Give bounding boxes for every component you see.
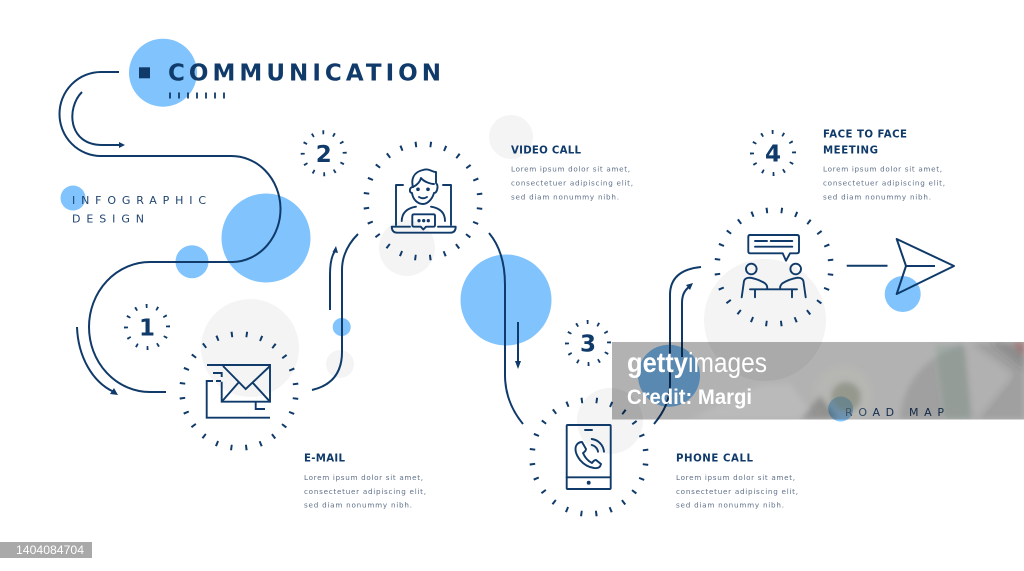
text: e-mail [304, 454, 426, 510]
watermark band: images [688, 347, 767, 378]
road map label: ROAD MAP [845, 406, 944, 419]
image id tag [0, 542, 92, 558]
arrow: left curved [77, 327, 118, 395]
text: video call: Lorem ipsum dolor sit amet, [511, 165, 630, 174]
text: e-mail: Lorem ipsum dolor sit amet, [304, 473, 423, 482]
text: video call: sed diam nonummy nibh. [511, 192, 619, 201]
subtitle: infographic design [72, 194, 206, 226]
icon: paper plane arrow [847, 239, 954, 294]
title: COMMUNICATION [168, 60, 441, 86]
text: face to face meeting: Lorem ipsum dolor sit amet, [823, 165, 942, 174]
step 2 number: 2 [316, 142, 332, 168]
ring: email [176, 328, 302, 454]
ring: phone call [526, 394, 652, 520]
flow line: step 3 to step 4 [654, 267, 701, 424]
text: e-mail: sed diam nonummy nibh. [304, 500, 412, 510]
text: video call [511, 145, 633, 201]
text: video call: VIDEO CALL [511, 145, 582, 156]
icon: face to face meeting [742, 235, 806, 297]
watermark band [612, 342, 1024, 425]
ring: video call [360, 138, 486, 264]
watermark band: Credit: Margi [627, 386, 752, 409]
icon: email envelope [207, 365, 270, 418]
subtitle: infographic design: DESIGN [72, 213, 144, 226]
text: face to face meeting: sed diam nonummy nibh. [823, 192, 931, 201]
step 1 number [125, 305, 169, 349]
text: face to face meeting [823, 130, 945, 201]
flow line: step 1 to step 2 [312, 234, 358, 390]
arrow: up to step 2 [330, 246, 338, 310]
step 1 number: 1 [139, 316, 155, 342]
step 2 number [301, 131, 346, 176]
title [139, 60, 441, 98]
text: video call: consectetuer adipiscing elit, [511, 179, 633, 188]
text: phone call: consectetuer adipiscing elit, [676, 487, 798, 496]
flow line: step 2 to step 3 [489, 233, 523, 424]
arrow: up to step 4 [682, 283, 693, 357]
background circles [60, 39, 921, 454]
watermark band: getty [627, 347, 688, 378]
icon: video call laptop [392, 169, 456, 233]
text: face to face meeting: FACE TO FACE [823, 130, 907, 141]
text: face to face meeting: consectetuer adipiscing elit, [823, 179, 945, 188]
step 3 number [566, 321, 610, 365]
image id tag: 1404084704 [16, 545, 85, 557]
text: e-mail: consectetuer adipiscing elit, [304, 487, 426, 496]
step 3 number: 3 [580, 332, 596, 358]
ring: face to face [711, 204, 837, 330]
text: phone call: sed diam nonummy nibh. [676, 500, 784, 510]
arrow: top curved [72, 92, 125, 148]
subtitle: infographic design: INFOGRAPHIC [72, 194, 206, 207]
text: phone call [676, 454, 798, 510]
text: phone call: Lorem ipsum dolor sit amet, [676, 473, 795, 482]
arrow: down to step 3 [515, 322, 521, 369]
step 4 number: 4 [765, 142, 781, 168]
text: phone call: PHONE CALL [676, 454, 754, 465]
text: face to face meeting: MEETING [823, 145, 878, 156]
flow line: opening path to step 1 [60, 72, 280, 392]
icon: smartphone call [567, 425, 611, 489]
text: e-mail: E-MAIL [304, 454, 346, 465]
step 4 number [751, 131, 795, 175]
